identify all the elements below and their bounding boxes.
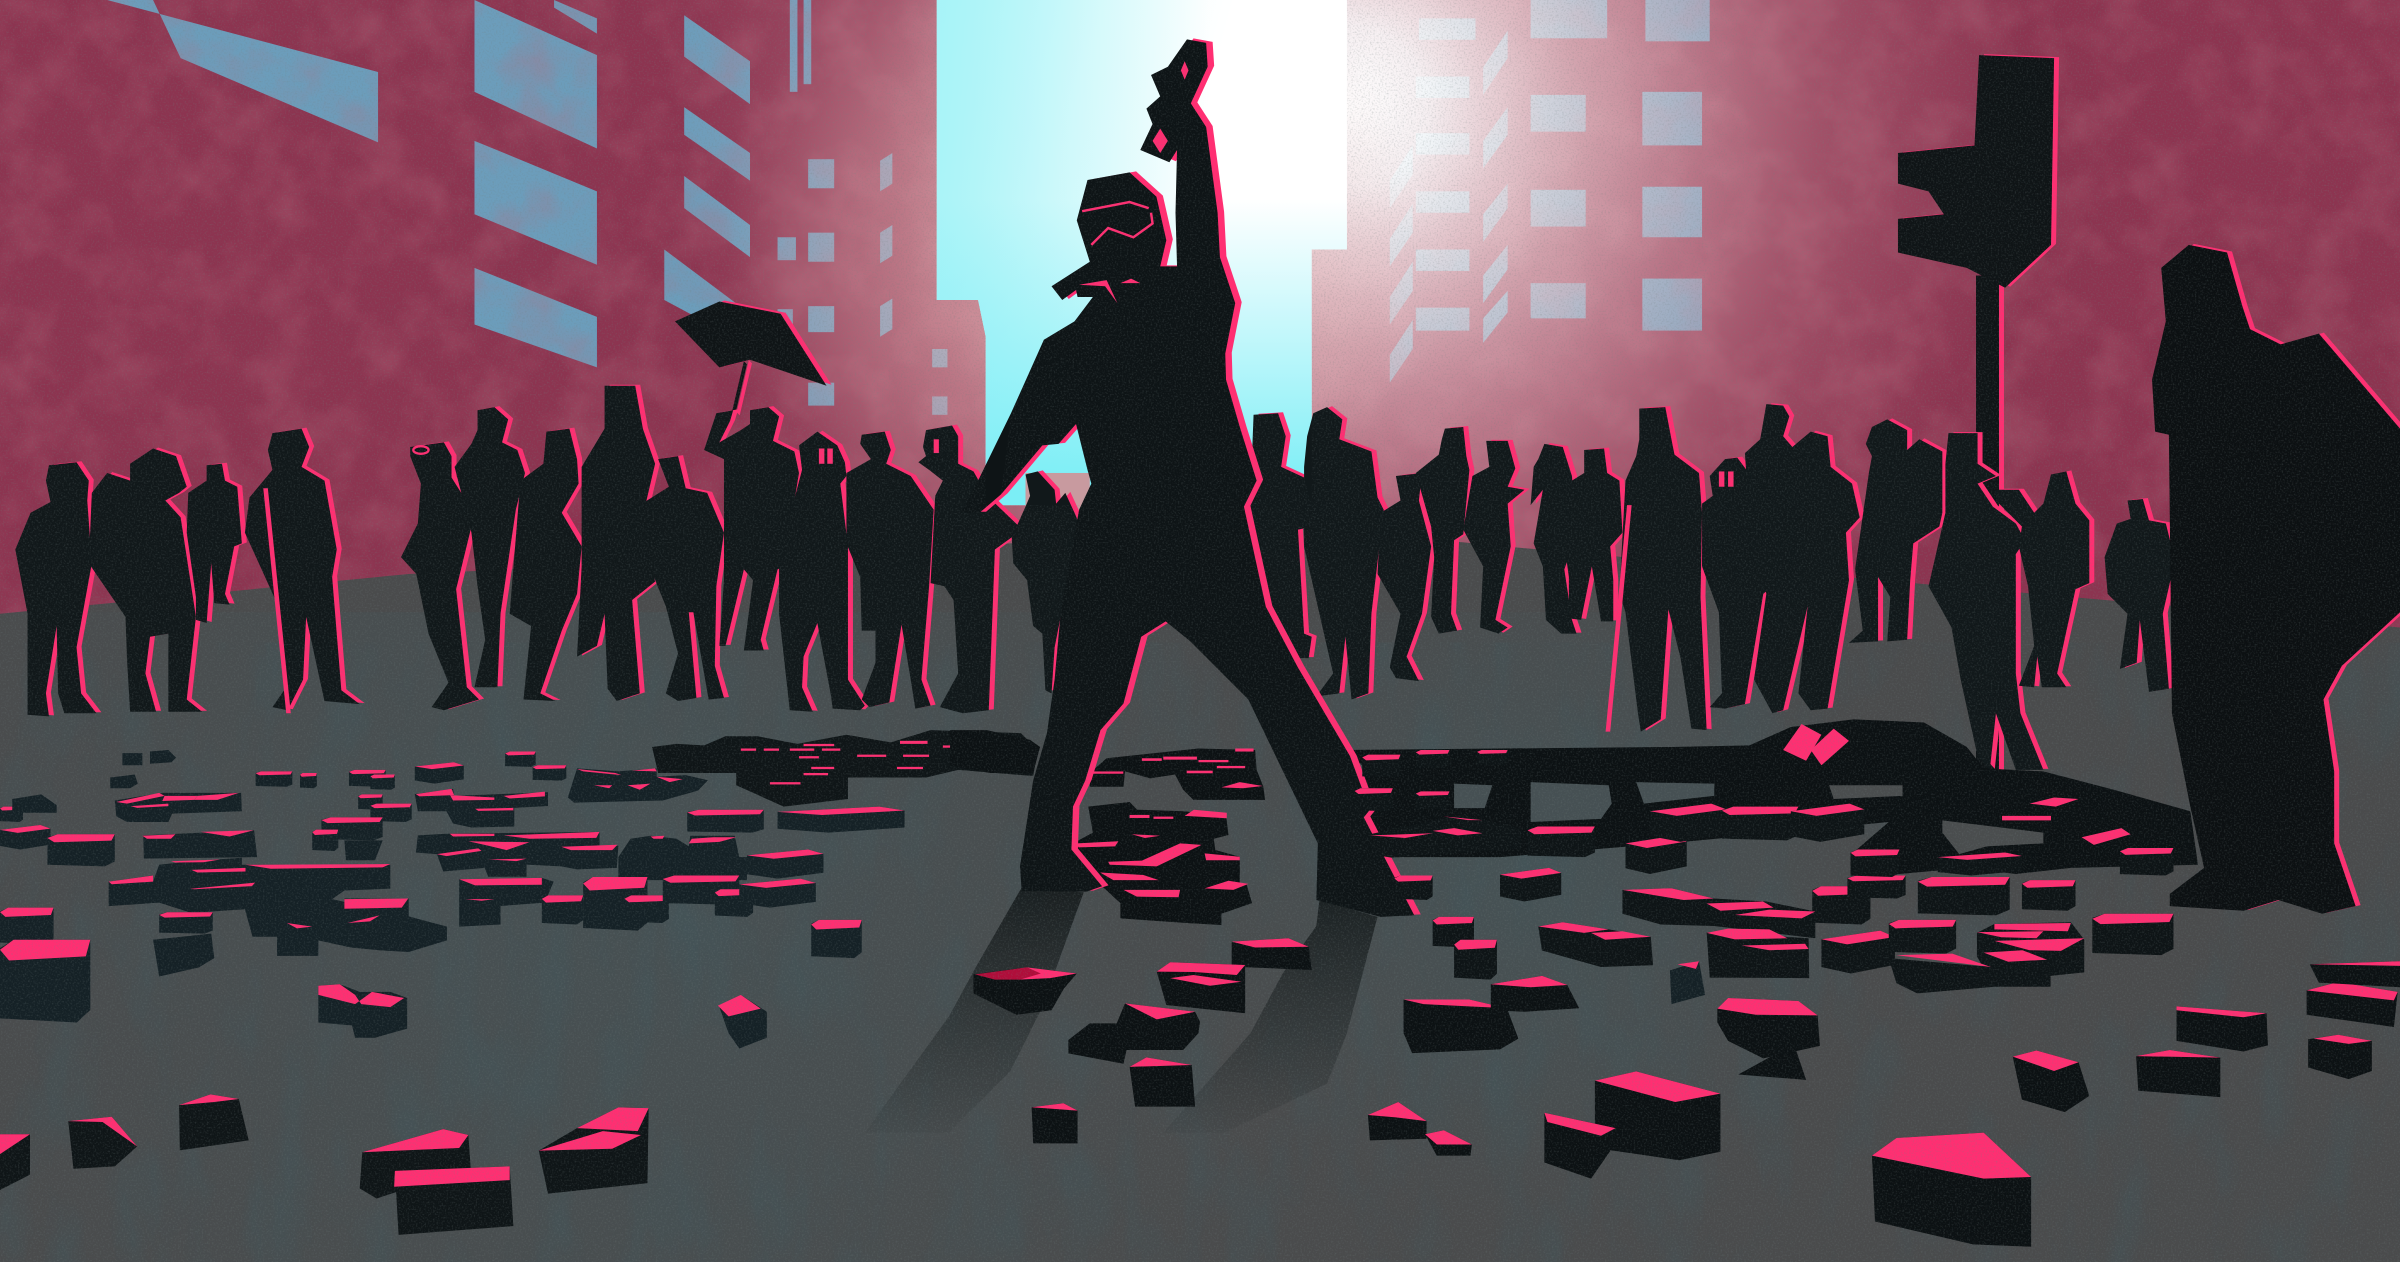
goggles — [1082, 202, 1153, 245]
person 17 — [1378, 473, 1431, 681]
person 8 — [577, 386, 655, 701]
person 28 — [1996, 471, 2089, 687]
bricks: centre around main figure — [950, 730, 1312, 1143]
person 21 — [1563, 448, 1622, 621]
person 6 — [455, 407, 525, 687]
traffic light — [1898, 55, 2054, 781]
light glow over buildings — [0, 0, 2400, 643]
person 4 — [245, 429, 360, 710]
gas mask highlights — [1079, 279, 1140, 303]
crowd: right group — [1249, 404, 2175, 770]
object in raised hand — [1153, 61, 1189, 153]
person 22 — [1619, 407, 1707, 732]
umbrella — [675, 302, 827, 416]
main figure shadows — [865, 886, 1378, 1133]
left building windows — [107, 0, 947, 415]
person 16 — [1304, 407, 1384, 699]
person 7 — [510, 429, 582, 701]
person 19 — [1463, 441, 1524, 634]
person 23 with gas mask — [1702, 458, 1772, 709]
building step behind main figure — [1026, 473, 1090, 549]
sky gap between buildings — [937, 0, 1347, 505]
person 13 holding book — [918, 426, 1022, 713]
ground teal patches — [0, 612, 2400, 1262]
person 5 — [401, 442, 479, 710]
wall mottling — [0, 0, 2400, 643]
person 12 — [846, 432, 934, 709]
person 10 with raised arm — [704, 407, 799, 651]
bricks: right foreground — [1368, 961, 2400, 1247]
person 11 with gas mask — [779, 432, 865, 712]
person 27 — [1929, 433, 2043, 770]
person 24 and 25 — [1745, 404, 1860, 713]
big foreground man with backpack — [2152, 245, 2400, 914]
crowd: left group — [15, 386, 1079, 716]
person 29 — [2105, 499, 2175, 692]
bricks: left field — [0, 750, 905, 1022]
bricks: left foreground — [0, 984, 767, 1235]
person 2 — [89, 448, 202, 712]
person 1 — [15, 462, 96, 716]
person 26 — [1849, 419, 1942, 643]
main figure: protester in gas mask with raised arm — [961, 39, 1414, 917]
crowd details: sticks and masks — [263, 439, 939, 713]
person 20 — [1531, 444, 1577, 634]
person 3 — [187, 464, 242, 623]
person 18 — [1416, 427, 1469, 634]
bricks: right field — [1355, 724, 2173, 993]
rubble: dark right mass — [1342, 719, 2198, 876]
figure body — [961, 39, 1414, 917]
person 14 — [1012, 471, 1079, 693]
street ground — [0, 528, 2400, 1262]
right crowd details: stick and mask bars — [1606, 471, 1734, 732]
rubble: dark left-centre mass — [652, 730, 1038, 807]
person 9 — [628, 456, 724, 701]
right building windows — [1390, 0, 1710, 383]
person 15 — [1249, 413, 1313, 658]
